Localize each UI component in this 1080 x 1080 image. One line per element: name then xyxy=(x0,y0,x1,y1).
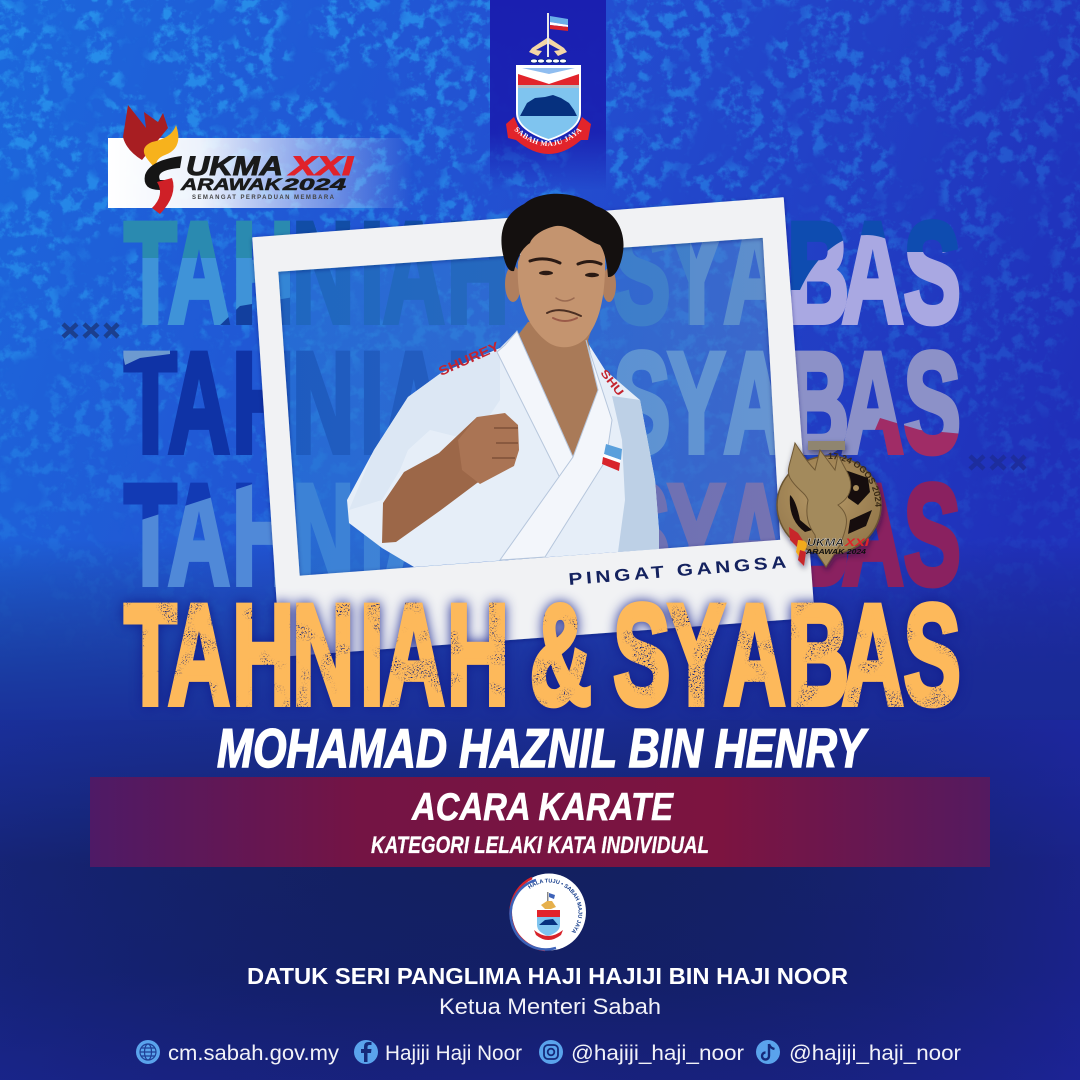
ribbon xyxy=(506,117,591,154)
ears xyxy=(505,266,616,302)
2024: 2024 xyxy=(281,175,347,194)
face xyxy=(518,218,605,347)
event title: ACARA KARATE xyxy=(411,786,674,829)
date ring text: 17-24 OGOS 2024 xyxy=(828,452,882,507)
small crest xyxy=(534,892,563,940)
Sukma XXI Sarawak 2024 logo xyxy=(108,105,413,214)
medal caption: Pingat Gangsa: PINGAT GANGSA xyxy=(568,552,791,589)
main heading: TAHNIAH & SYABAS xyxy=(124,574,961,734)
tagline: SEMANGAT PERPADUAN MEMBARA xyxy=(192,195,335,201)
ARAWAK: ARAWAK xyxy=(180,175,283,194)
row 2 colours xyxy=(123,349,960,456)
athlete in karate gi xyxy=(347,194,659,567)
row 1 colours xyxy=(123,219,960,326)
flag on pole xyxy=(547,13,568,57)
row 3 colours xyxy=(142,481,960,588)
bronze medal xyxy=(774,440,886,572)
gi right sleeve shade xyxy=(612,396,659,552)
clasped hands xyxy=(529,38,567,56)
tiktok: @hajiji_haji_noor xyxy=(789,1042,961,1065)
chest logo: SHU xyxy=(598,367,626,399)
event category: KATEGORI LELAKI KATA INDIVIDUAL xyxy=(371,832,709,859)
Sabah flag patch xyxy=(602,444,622,471)
white photo frame xyxy=(253,198,814,656)
chief minister title: Ketua Menteri Sabah xyxy=(439,994,661,1019)
flag coloured arcs xyxy=(511,878,545,950)
bead row xyxy=(530,59,566,63)
decorative cross marks left xyxy=(63,324,118,337)
mini games logo: UKMA xyxy=(807,537,844,549)
chief minister name: DATUK SERI PANGLIMA HAJI HAJIJI BIN HAJI NOOR xyxy=(247,963,848,989)
mini games logo xyxy=(789,527,870,566)
UKMA: UKMA xyxy=(186,151,283,181)
right lapel xyxy=(500,340,612,560)
website: cm.sabah.gov.my xyxy=(168,1042,340,1065)
forearm xyxy=(382,417,515,543)
event band xyxy=(90,777,990,867)
Sabah coat of arms xyxy=(506,13,591,154)
hair xyxy=(501,194,624,277)
mini games logo: ARAWAK 2024 xyxy=(805,549,866,556)
decorative cross marks right xyxy=(970,456,1025,469)
crest tab at top xyxy=(490,0,606,190)
medal disc xyxy=(777,456,881,554)
sleeve shoulder logo: SHUREY xyxy=(436,338,502,379)
logo banner xyxy=(108,138,413,208)
gi fold shading xyxy=(349,350,500,510)
instagram: @hajiji_haji_noor xyxy=(571,1042,744,1065)
gi body xyxy=(347,331,659,567)
photo window tint xyxy=(277,237,781,577)
motto: SABAH MAJU JAYA xyxy=(514,127,582,146)
torch flame xyxy=(123,105,182,214)
ghost repeated TAHNIAH & SYABAS lettering xyxy=(123,219,960,588)
fist xyxy=(458,413,519,484)
athlete name: MOHAMAD HAZNIL BIN HENRY xyxy=(217,717,868,779)
eyebrows, eyes, nose and mouth xyxy=(530,259,601,321)
shield xyxy=(516,65,581,141)
strap loop xyxy=(808,441,845,450)
mini games logo: XXI xyxy=(844,537,870,549)
left lapel xyxy=(497,331,573,478)
XXI: XXI xyxy=(287,151,354,181)
chief minister round logo xyxy=(509,874,586,952)
flame relief xyxy=(788,443,851,567)
neck and chest xyxy=(519,322,598,457)
facebook: Hajiji Haji Noor xyxy=(385,1042,522,1065)
tribal ornament xyxy=(790,470,872,534)
social links footer xyxy=(136,1040,961,1065)
logo ring text: HALA TUJU • SABAH MAJU JAYA xyxy=(528,878,582,933)
